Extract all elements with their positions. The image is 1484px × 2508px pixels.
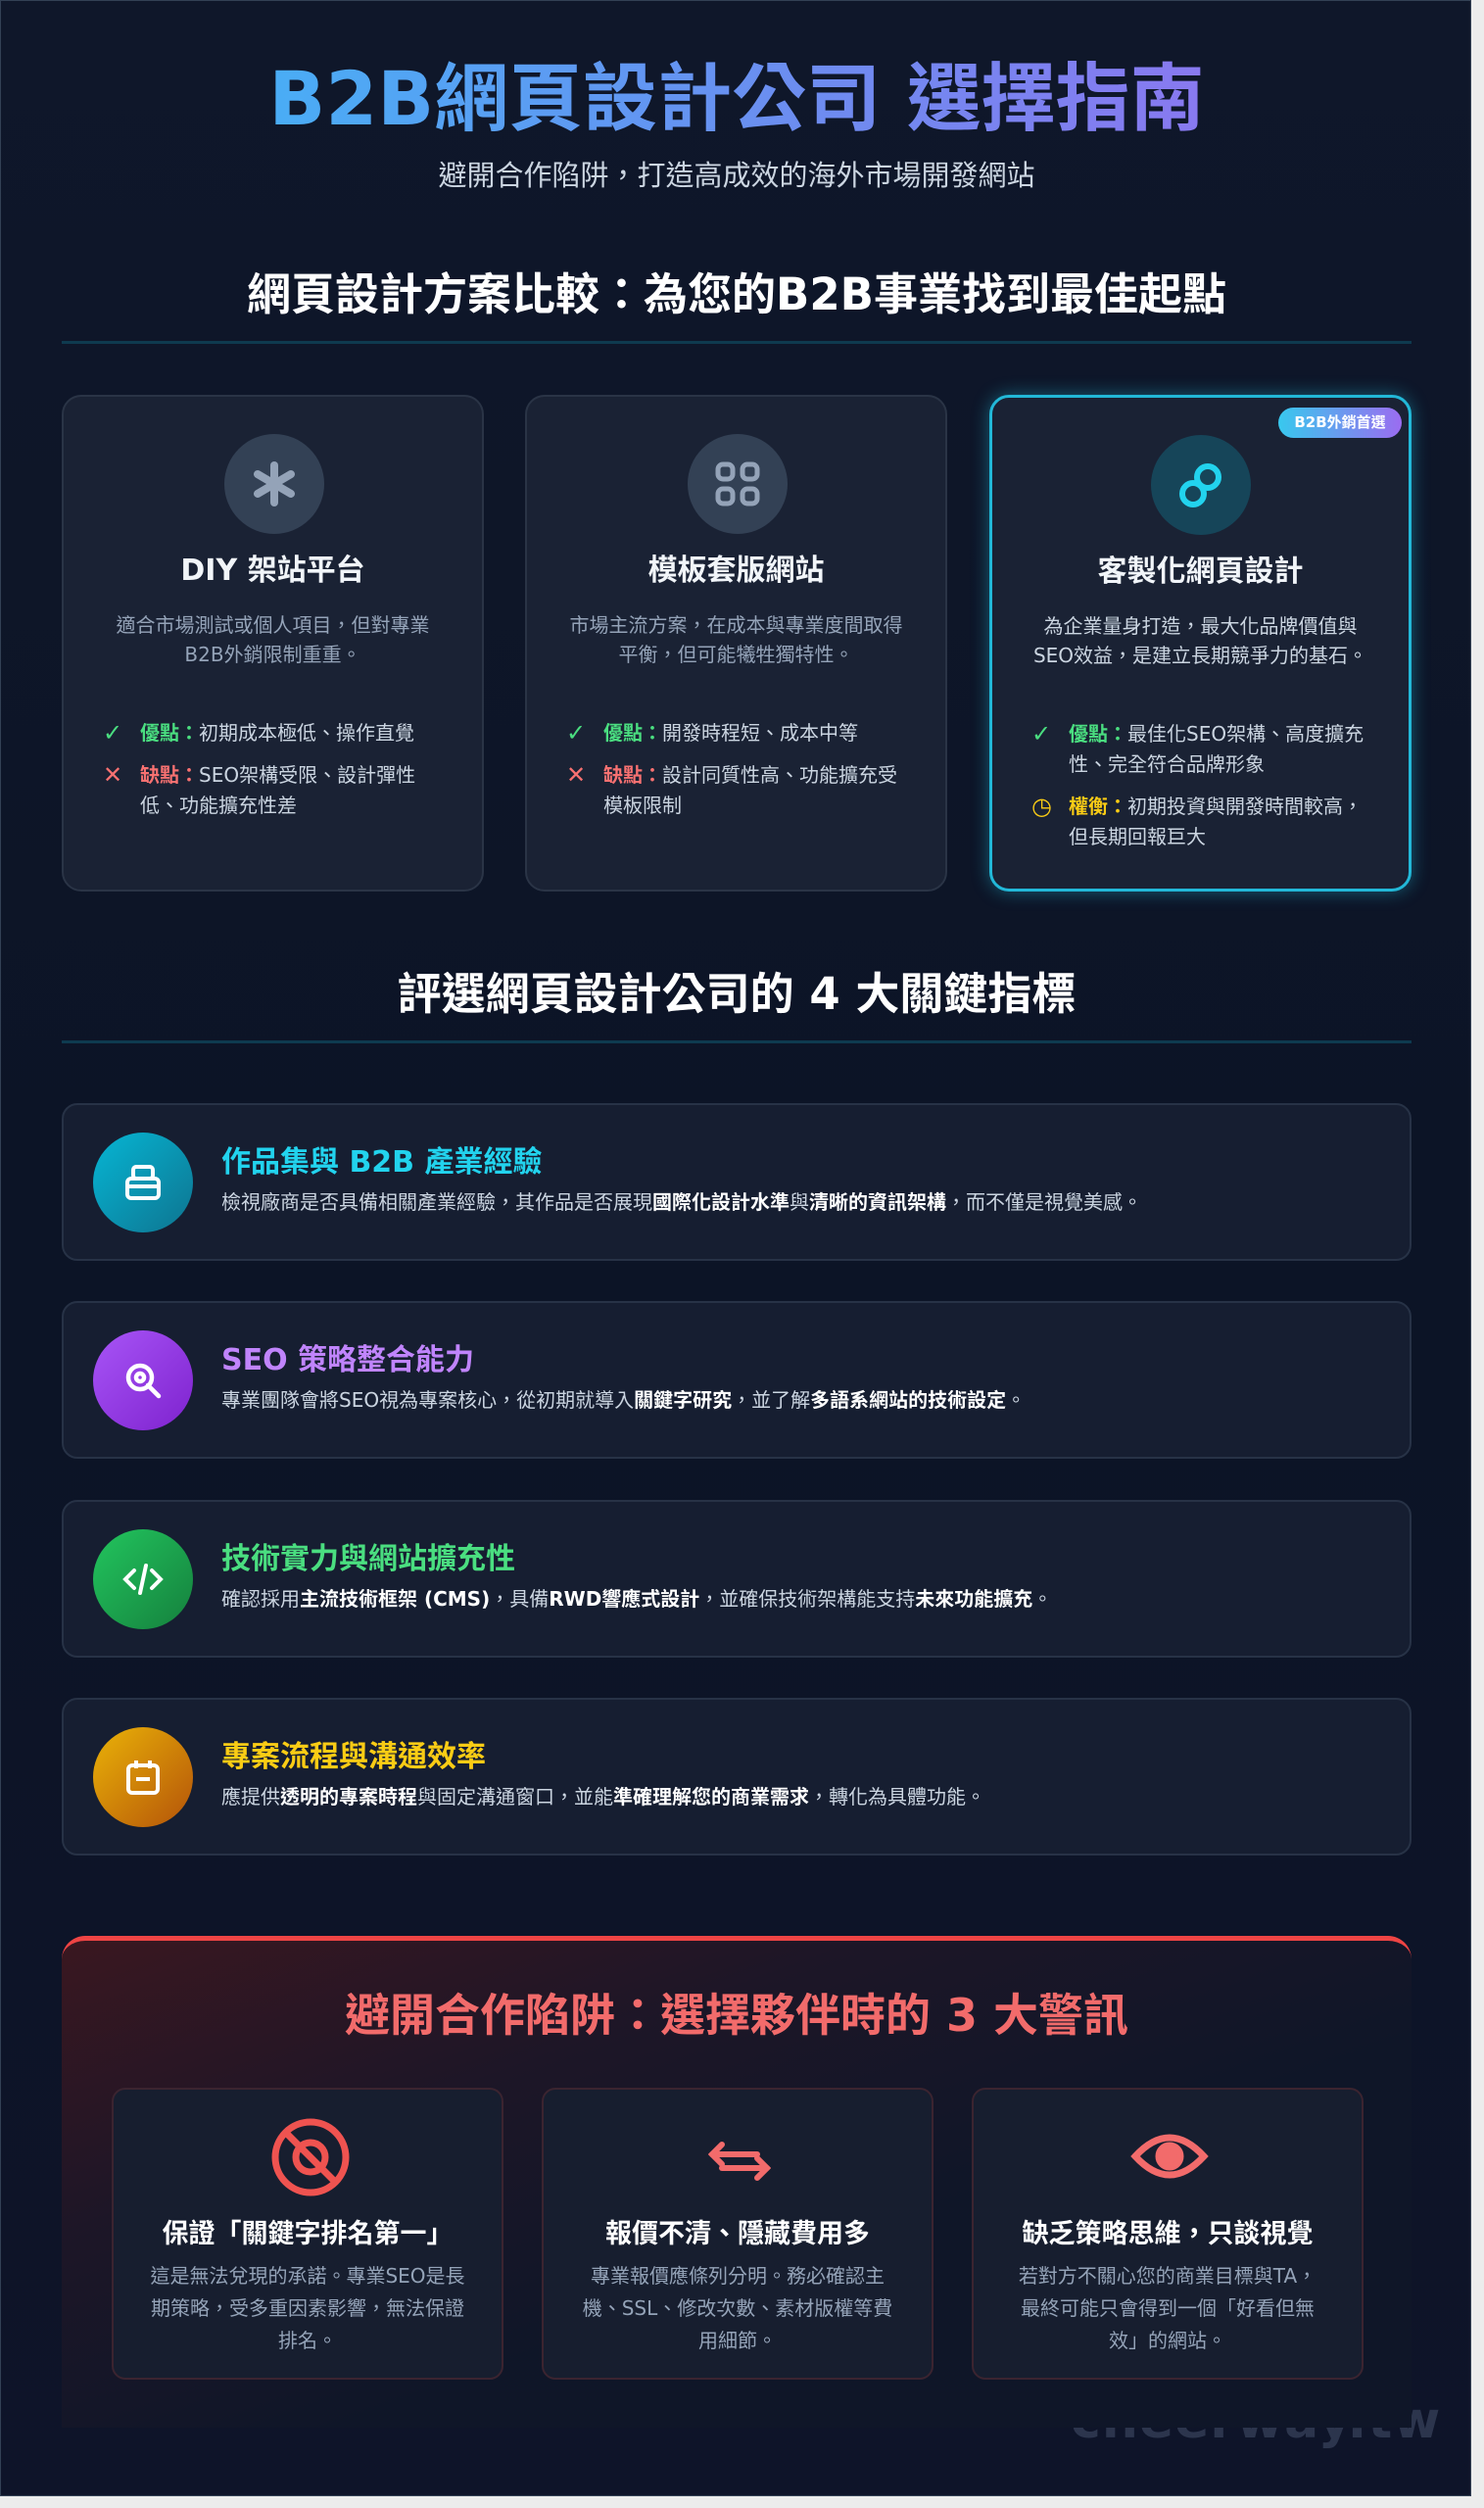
criterion title: SEO 策略整合能力 bbox=[221, 1343, 474, 1377]
pros/cons bbox=[566, 719, 897, 817]
icon: search bbox=[93, 1330, 193, 1430]
icon: eye bbox=[1130, 2134, 1209, 2179]
pros/cons: ✓ bbox=[103, 719, 122, 747]
pros/cons: ✕ bbox=[103, 761, 122, 789]
pros/cons: 優點：初期成本極低、操作直覺 bbox=[140, 721, 414, 745]
panel: custom design (highlighted) bbox=[989, 395, 1412, 892]
criterion title: 專案流程與溝通效率 bbox=[221, 1740, 486, 1774]
icon: portfolio bbox=[93, 1133, 193, 1232]
subtitle: 避開合作陷阱，打造高成效的海外市場開發網站 bbox=[438, 153, 1034, 194]
card title: 模板套版網站 bbox=[648, 554, 825, 588]
icon: calendar bbox=[93, 1727, 193, 1827]
panel: criterion 3 bbox=[62, 1500, 1412, 1658]
card desc bbox=[1033, 614, 1367, 667]
badge bbox=[1278, 408, 1402, 438]
pros/tradeoff bbox=[1031, 720, 1364, 848]
card title: DIY 架站平台 bbox=[180, 554, 365, 588]
section heading: criteria: 評選網頁設計公司的 4 大關鍵指標 bbox=[398, 968, 1076, 1020]
title: B2B網頁設計公司 選擇指南 bbox=[268, 55, 1205, 142]
pros/cons: 缺點：設計同質性高、功能擴充受模板限制 bbox=[603, 763, 897, 817]
card desc: 適合市場測試或個人項目，但對專業B2B外銷限制重重。 bbox=[116, 613, 429, 666]
icon: asterisk bbox=[224, 434, 324, 534]
pros/cons: ✓ bbox=[566, 719, 586, 747]
criterion desc: 確認採用主流技術框架 (CMS)，具備RWD響應式設計，並確保技術架構能支持未來功能擴充。 bbox=[221, 1587, 1052, 1611]
warning title: 缺乏策略思維，只談視覺 bbox=[1023, 2219, 1313, 2249]
section heading: comparison: 網頁設計方案比較：為您的B2B事業找到最佳起點 bbox=[247, 268, 1226, 320]
criterion title: 作品集與 B2B 產業經驗 bbox=[221, 1145, 543, 1180]
criterion title: 技術實力與網站擴充性 bbox=[221, 1542, 515, 1576]
icon: dollar arrows bbox=[708, 2142, 771, 2181]
pros/cons: 優點：開發時程短、成本中等 bbox=[603, 721, 858, 745]
warning desc: 專業報價應條列分明。務必確認主機、SSL、修改次數、素材版權等費用細節。 bbox=[583, 2264, 892, 2352]
pros/tradeoff: ✓ bbox=[1031, 720, 1051, 748]
criterion desc: 應提供透明的專案時程與固定溝通窗口，並能準確理解您的商業需求，轉化為具體功能。 bbox=[221, 1785, 985, 1809]
pros/cons: ✕ bbox=[566, 761, 586, 789]
title bbox=[1, 50, 1472, 148]
warning card 1 bbox=[112, 2088, 503, 2380]
panel: warnings bbox=[62, 1936, 1412, 2428]
panel: criterion 4 bbox=[62, 1698, 1412, 1856]
card desc: 為企業量身打造，最大化品牌價值與 bbox=[1044, 614, 1358, 638]
card desc: SEO效益，是建立長期競爭力的基石。 bbox=[1033, 644, 1367, 667]
pros/tradeoff: 權衡：初期投資與開發時間較高，但長期回報巨大 bbox=[1069, 795, 1363, 848]
warning title: 保證「關鍵字排名第一」 bbox=[163, 2219, 453, 2249]
warning card 2 bbox=[542, 2088, 933, 2380]
card title: 客製化網頁設計 bbox=[1097, 555, 1303, 589]
badge: B2B外銷首選 bbox=[1294, 413, 1386, 431]
icon: code bbox=[93, 1529, 193, 1629]
card desc: 市場主流方案，在成本與專業度間取得平衡，但可能犧牲獨特性。 bbox=[570, 613, 903, 666]
pros/tradeoff: ◷ bbox=[1031, 793, 1052, 820]
criterion desc: 專業團隊會將SEO視為專案核心，從初期就導入關鍵字研究，並了解多語系網站的技術設定。 bbox=[221, 1388, 1026, 1412]
pros/cons: 缺點：SEO架構受限、設計彈性低、功能擴充性差 bbox=[140, 763, 415, 817]
warning desc: 這是無法兌現的承諾。專業SEO是長期策略，受多重因素影響，無法保證排名。 bbox=[150, 2264, 465, 2352]
panel: criterion 2 bbox=[62, 1301, 1412, 1459]
panel: DIY platform bbox=[62, 395, 484, 892]
pros/cons bbox=[103, 719, 415, 817]
panel: criterion 1 bbox=[62, 1103, 1412, 1261]
panel: template sites bbox=[525, 395, 947, 892]
warning card 3 bbox=[972, 2088, 1364, 2380]
warning title: 報價不清、隱藏費用多 bbox=[605, 2219, 870, 2249]
pros/tradeoff: 優點：最佳化SEO架構、高度擴充性、完全符合品牌形象 bbox=[1069, 722, 1364, 776]
icon: grid bbox=[688, 434, 788, 534]
warnings heading: 避開合作陷阱：選擇夥伴時的 3 大警訊 bbox=[345, 1989, 1128, 2042]
watermark: cheerway.tw bbox=[1071, 2391, 1441, 2450]
icon: no ranking bbox=[272, 2118, 349, 2196]
criterion desc: 檢視廠商是否具備相關產業經驗，其作品是否展現國際化設計水準與清晰的資訊架構，而不僅是視覺美感。 bbox=[221, 1190, 1142, 1214]
icon: link bbox=[1151, 435, 1251, 535]
warning desc: 若對方不關心您的商業目標與TA，最終可能只會得到一個「好看但無效」的網站。 bbox=[1019, 2264, 1316, 2352]
